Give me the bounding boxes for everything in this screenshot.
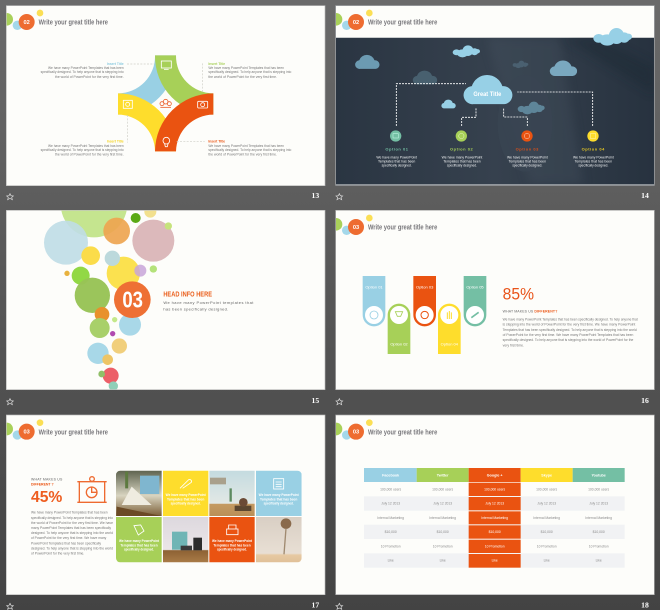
callout: top left [41,62,154,79]
body paragraph: PowerPoint Templates that has been specifically [31,541,101,545]
row: marketing: Internal Marketing [533,516,560,520]
body paragraph: the world of PowerPoint for the very first time. We have [31,521,113,525]
callout: bottom right: Insert Title [208,140,225,144]
panel: slide 18 comparison table [330,415,654,610]
tile: paperclip: specifically designed. [171,502,201,506]
icon: monitor [161,61,171,69]
body paragraph: very first time. [503,343,524,347]
panel: slide 14 cloud flow [330,6,654,200]
icon: play box [123,100,132,108]
tile grid [116,471,302,562]
body paragraph: designed. To help anyone that is stepping into the world [31,531,113,535]
subheading: DIFFERENT ? [31,482,54,486]
tile: clipboard [256,471,302,516]
tab: option 01: Option 01 [365,286,383,290]
panel: slide 13 four-petal diagram [0,6,325,200]
row: like [388,559,602,563]
body paragraph: specifically designed. To help anyone that is stepping into [31,516,113,520]
callout: bottom right: We have many PowerPoint Templates that has been [208,144,284,148]
body paragraph: is stepping into the world of PowerPoint for the very first time. We have many PowerPoint [503,323,635,327]
callout: top right: Insert Title [208,62,225,66]
row: price: $10,000 [489,530,501,534]
row: date [381,502,608,506]
section number badge [114,281,151,318]
body paragraph: specifically designed. To help anyone that is stepping into the world of PowerPoint for the [503,338,633,342]
body paragraph: many PowerPoint Templates that has been specifically [31,526,111,530]
body paragraph: We have many PowerPoint Templates that has been specifically designed. To help anyone that [503,318,638,322]
row: users: 100,000 users [588,488,610,492]
tab: option 01 [363,276,385,326]
icon: slide star [336,399,343,405]
yellow petal [118,93,176,151]
table header: Skype [541,473,552,477]
tile: clipboard: We have many PowerPoint [259,493,300,497]
row: marketing: Internal Marketing [481,516,508,520]
row: date: July 12 2013 [433,502,452,506]
photo: shelf [209,471,255,516]
option 02: Option 02 [450,147,473,152]
green petal [155,55,213,115]
icon: slide star [7,603,13,609]
body paragraph: of PowerPoint for the very first time. [31,552,84,556]
callout: bottom right: specifically designed. To help anyone that is stepping into [208,148,291,152]
tile: trolley: specifically designed. [124,548,154,552]
option 04: Templates that has been [575,160,612,164]
icon: camera [198,101,208,108]
slide 18 heading: Write your great title here [368,427,437,436]
slide 14 heading: Write your great title here [368,18,437,27]
bubble cluster [44,210,174,390]
tile: clipboard: Templates that has been [260,497,297,501]
dashed connector arrows [396,84,593,126]
callout: top right: specifically designed. To help anyone that is stepping into [208,70,291,74]
row: promotion: 10 Promotion [485,544,505,548]
subheading: WHAT MAKES US [31,478,63,482]
tab: option 04: Option 04 [441,342,458,346]
slide 16 header badge [336,214,373,235]
callout: top left: Insert Title [107,62,124,66]
option 04 [573,130,614,168]
photo: dried flower [256,517,302,562]
callout: bottom left: the world of PowerPoint for the very first time. [55,153,124,157]
big stat: 45% [31,489,62,506]
table header: Facebook [382,473,400,477]
highlighted column [469,483,521,568]
slide 16 header badge: 03 [353,225,359,231]
row: like: Like [440,559,446,563]
cloud: right [550,60,577,76]
row: price: $10,000 [437,530,449,534]
row: promotion: 10 Promotion [381,544,401,548]
icon: slide star [7,194,13,200]
photo: cameras [163,517,208,562]
slide 13 header badge: 02 [24,20,30,26]
tile: printer: Templates that has been [213,543,251,547]
big stat: 85% [503,284,534,303]
cloud: upper left [355,55,380,69]
tile: trolley [116,517,162,562]
cloud: lower right [518,102,545,114]
tile: trolley: We have many PowerPoint [119,539,160,543]
callout: top right: the world of PowerPoint for the very first time. [208,75,277,79]
row: like: Like [492,559,498,563]
blue petal [118,55,176,115]
tile: paperclip: Templates that has been [167,497,204,501]
petal diagram [118,55,213,151]
row: price: $10,000 [541,530,553,534]
option 01: Option 01 [385,147,409,152]
cloud: upper centre [453,45,480,57]
callout: top left: specifically designed. To help anyone that is stepping into [41,70,124,74]
slide 13 heading: Write your great title here [39,18,108,27]
table header [364,468,625,482]
tile: printer: We have many PowerPoint [212,539,253,543]
slide 18 header badge [336,419,373,440]
dark photo band [336,38,654,185]
page number: 14 [641,191,649,200]
row: like: Like [388,559,394,563]
callout: bottom right: the world of PowerPoint for the very first time. [208,153,277,157]
tab: option 04 [438,304,461,354]
row: date: July 12 2013 [381,502,400,506]
body paragraph: We have many PowerPoint Templates that has been [31,511,108,515]
row: promotion: 10 Promotion [537,544,557,548]
callout: top right [203,62,291,93]
tile: paperclip [163,471,208,516]
section description: We have many PowerPoint templates that [163,300,254,305]
slide 17 header badge [6,419,44,440]
slide 16 sheet [336,210,654,390]
option 03: specifically designed. [512,164,542,168]
photo: paper craft [116,471,162,516]
option 03: Templates that has been [509,160,546,164]
option 01: specifically designed. [382,164,412,168]
slide 14 sheet [336,6,654,185]
option 02 [442,130,482,168]
section description: has been specifically designed. [163,306,228,311]
tab: option 02: Option 02 [390,342,408,346]
body paragraph: designed. To help anyone that is stepping into the world [31,546,113,550]
tab: option 03: Option 03 [416,286,433,290]
decorative clouds [355,28,632,114]
slide 18 sheet [336,415,654,595]
row: like: Like [544,559,550,563]
option 04: specifically designed. [578,164,608,168]
row: promotion [381,544,609,548]
icon: slide star [7,399,13,405]
page number: 15 [312,396,319,405]
page number: 16 [641,396,649,405]
option 01: We have many PowerPoint [376,155,417,159]
row: price: $10,000 [593,530,605,534]
orange petal [155,93,213,151]
row: marketing [377,516,612,520]
panel: slide 15 section bubbles [6,210,326,406]
row: marketing: Internal Marketing [585,516,612,520]
option 04: Option 04 [582,147,605,152]
callout: top left: the world of PowerPoint for the very first time. [55,75,124,79]
row: promotion: 10 Promotion [433,544,453,548]
icon: people [160,99,171,107]
row: users: 100,000 users [536,488,558,492]
row: date: July 12 2013 [485,502,504,506]
tile: clipboard: specifically designed. [264,502,294,506]
section number badge: 03 [122,287,143,313]
row: users: 100,000 users [484,488,506,492]
option 02: We have many PowerPoint [442,155,482,159]
page number: 13 [312,191,319,200]
callout: top left: We have many PowerPoint Templates that has been [48,66,124,70]
callout: top right: We have many PowerPoint Templates that has been [208,66,284,70]
row: users: 100,000 users [432,488,454,492]
tab: option 05: Option 05 [466,286,484,290]
body paragraph [503,318,638,347]
table [364,468,625,568]
page number: 17 [312,601,319,610]
option 03: We have many PowerPoint [507,155,548,159]
row: price [385,530,605,534]
row: price: $10,000 [385,530,397,534]
option 04: We have many PowerPoint [573,155,614,159]
tile: trolley: Templates that has been [120,543,158,547]
icon: slide star [336,603,343,609]
tile: printer: specifically designed. [217,548,247,552]
page number: 18 [641,601,649,610]
slide 14 header badge [336,10,373,30]
callout: bottom right [177,140,291,157]
table header: Twitter [437,473,449,477]
row: users [380,488,610,492]
option 02: specifically designed. [447,164,477,168]
row: like: Like [596,559,602,563]
body paragraph: Templates that has been specifically designed. To help anyone that is stepping into the world [503,328,637,332]
slide 13 sheet [6,6,325,186]
body paragraph: of PowerPoint for the very first time. We have many [31,536,107,540]
slide 14 header badge: 02 [353,20,359,26]
option 01: Templates that has been [378,160,415,164]
tile: printer [209,517,255,562]
table header: Google + [487,473,503,477]
slide 15 sheet [6,210,325,390]
cloud: small dim [513,61,528,68]
icon: presentation board [77,477,107,502]
callout: bottom left: specifically designed. To help anyone that is stepping into [41,148,124,152]
row: marketing: Internal Marketing [377,516,404,520]
table header: Youtube [591,473,606,477]
row: marketing: Internal Marketing [429,516,456,520]
option 01 [376,130,417,168]
central cloud with title [464,75,512,104]
slide 18 header badge: 03 [353,430,359,436]
cloud: behind line [413,71,437,84]
callout: bottom left: We have many PowerPoint Templates that has been [48,144,124,148]
table row stripes [364,496,625,568]
section heading: HEAD INFO HERE [163,290,212,299]
tab: option 02 [388,304,410,354]
cloud: top right [593,28,632,46]
row: promotion: 10 Promotion [589,544,609,548]
panel: slide 17 photo grid [0,415,325,610]
tile: paperclip: We have many PowerPoint [166,493,207,497]
option 03: Option 03 [516,147,539,152]
option 03 [507,130,548,168]
slide 16 heading: Write your great title here [368,222,437,231]
row: date: July 12 2013 [537,502,556,506]
icon: light bulb [163,137,170,147]
row: users: 100,000 users [380,488,402,492]
body paragraph [31,511,113,556]
callout: bottom left [41,115,127,157]
section description [163,300,254,311]
option 02: Templates that has been [443,160,481,164]
tab: option 03 [413,276,436,326]
panel: slide 16 option tabs [330,210,654,405]
row: date: July 12 2013 [589,502,608,506]
subheading [31,478,63,486]
central cloud with title: Great Title [473,91,502,98]
body paragraph: of PowerPoint for the very first time. We have many PowerPoint Templates that has been [503,333,633,337]
cloud: small left [441,100,456,108]
icon: slide star [336,194,343,200]
tab: option 05 [464,276,486,326]
slide 17 heading: Write your great title here [39,427,108,436]
slide 17 sheet [6,415,325,595]
callout: bottom left: Insert Title [107,140,124,144]
slide 13 header badge [6,10,44,30]
slide 17 header badge: 03 [24,430,30,436]
subheading: WHAT MAKES US DIFFERENT? [503,310,557,314]
